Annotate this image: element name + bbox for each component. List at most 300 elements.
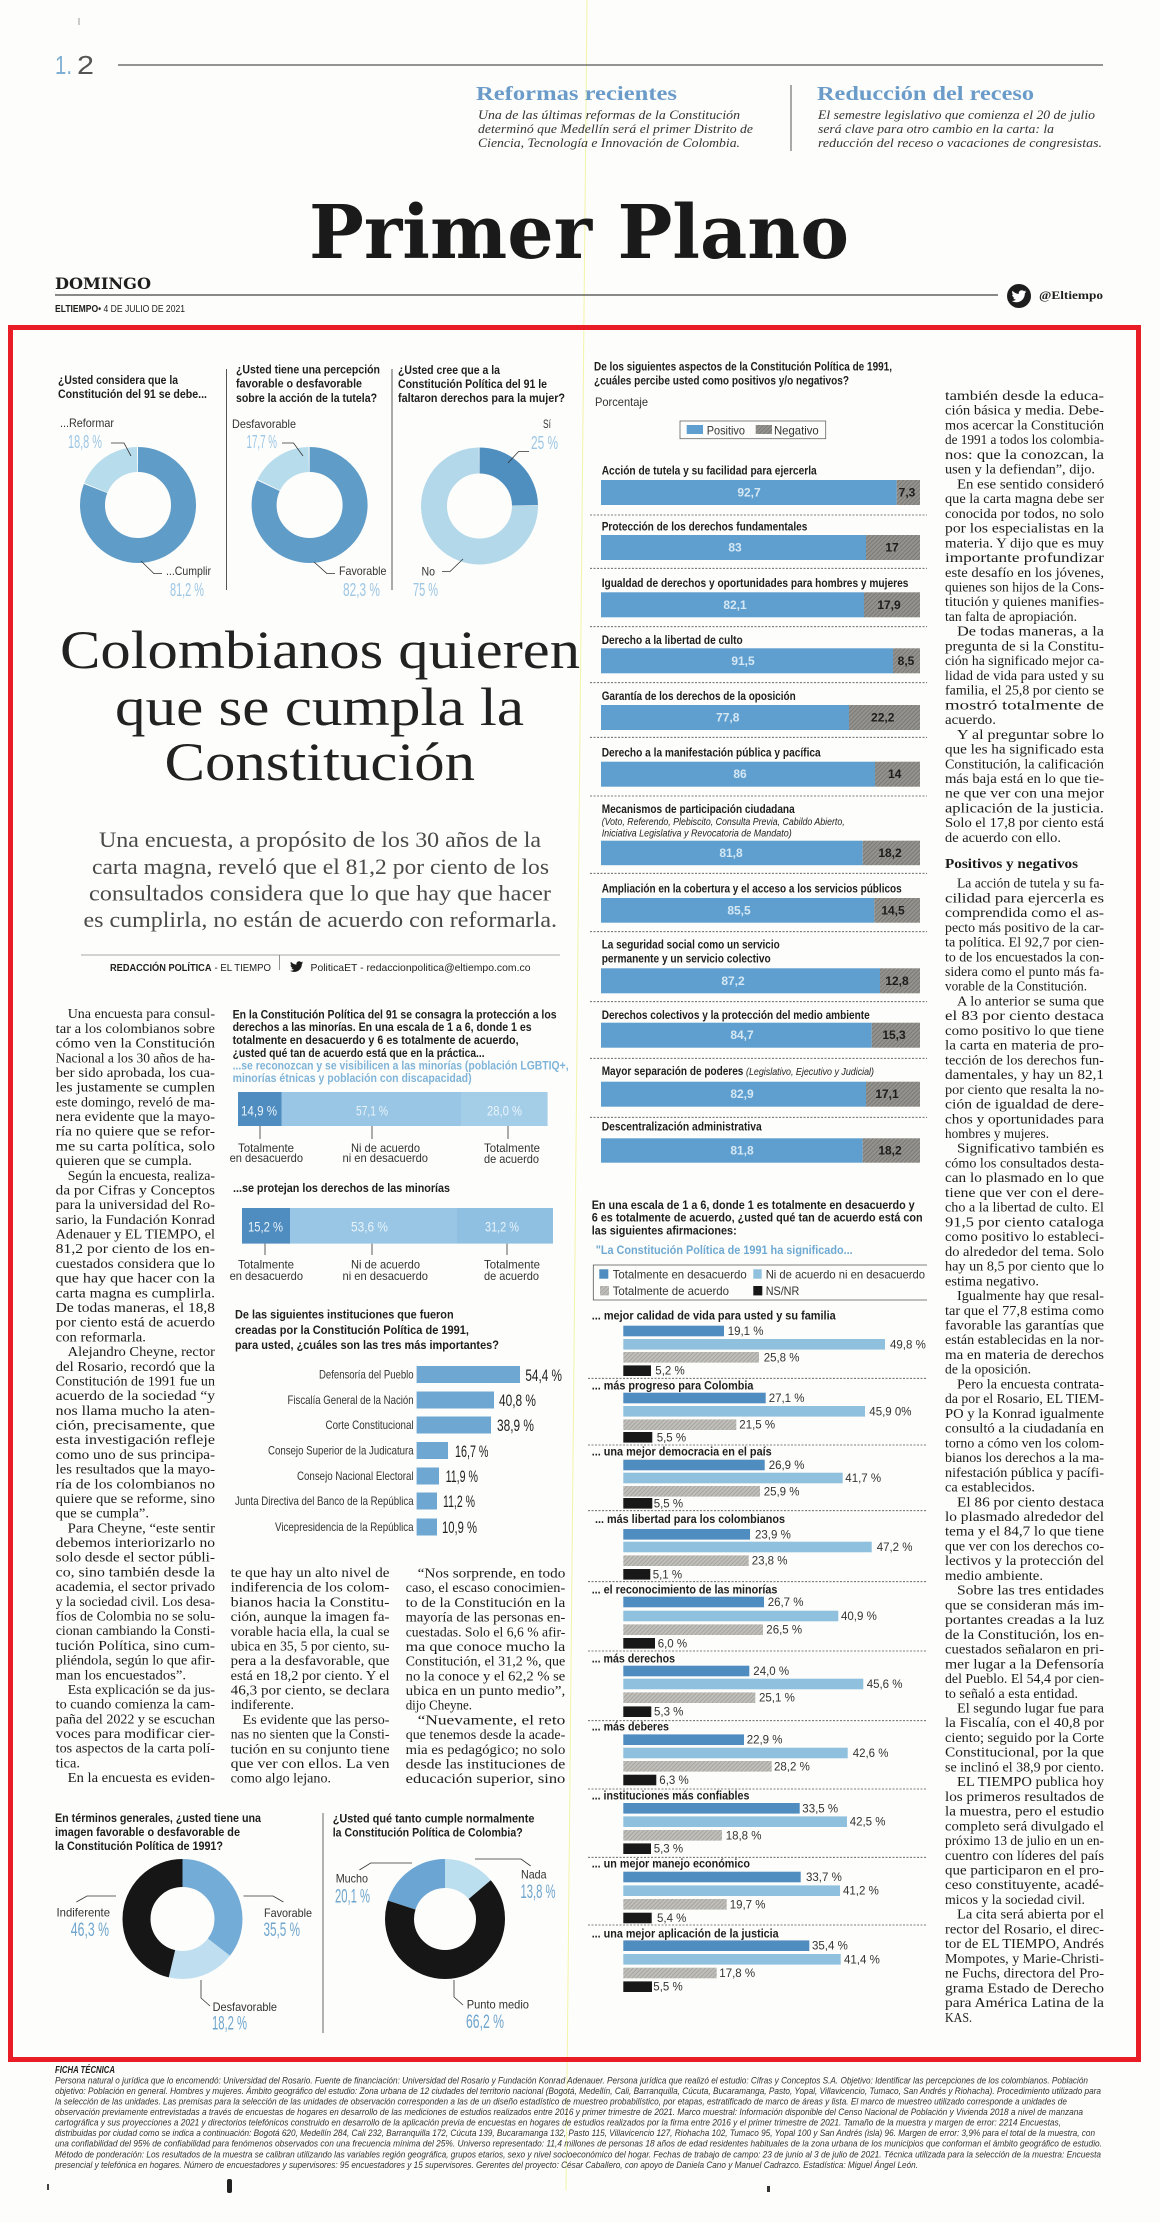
- chart: aspectos positivos y negativos: De los siguientes aspectos de la Constitución Política de 1991,: [594, 360, 892, 374]
- group: más deberes: 22,9 %: [747, 1735, 783, 1747]
- group: reconocimiento de las minorías: 40,9 %: [841, 1611, 877, 1623]
- body text: column 2: vorable hacia ella, la cual se: [231, 1625, 390, 1640]
- donut: imagen favorable o desfavorable: 35,5 %: [264, 1920, 300, 1941]
- body text: column 3: “Nos sorprende, en todo: [418, 1566, 565, 1582]
- group: más derechos: 5,3 %: [654, 1707, 683, 1719]
- donut: Constitución se debe: 81,2 %: [170, 580, 204, 600]
- group: mejor manejo económico: 5,4 %: [657, 1913, 686, 1925]
- body text: column 3: educación superior, sino: [406, 1772, 565, 1787]
- body text: column 4: bianos los derechos a la ma-: [945, 1451, 1104, 1466]
- body text: column 4: [945, 389, 1105, 2026]
- page number: 1.: [55, 50, 72, 80]
- donut: derechos para la mujer: Sí: [543, 417, 551, 431]
- legend: positivo / negativo: [680, 421, 826, 439]
- body text: column 3: dijo Cheyne.: [406, 1699, 472, 1714]
- donut: derechos para la mujer: Constitución Política del 91 le: [398, 377, 547, 391]
- group: más progreso: [592, 1379, 912, 1444]
- donut: acción de tutela: [232, 362, 387, 600]
- donut: imagen favorable o desfavorable: En términos generales, ¿usted tiene una: [55, 1811, 261, 1825]
- body text: column 4: lidad de vida para usted y su: [945, 669, 1104, 684]
- body text: column 1: Según la encuesta, realiza-: [68, 1169, 215, 1184]
- chart: la Constitución ha significado: las siguientes afirmaciones:: [592, 1223, 737, 1237]
- donut: Constitución se debe: 18,8 %: [68, 432, 102, 452]
- bar: se reconozcan: ni en desacuerdo: [342, 1151, 428, 1165]
- row: cobertura servicios públicos: 85,5: [727, 904, 751, 918]
- bar: se reconozcan: en desacuerdo: [230, 1151, 303, 1165]
- group: mejor calidad de vida: ... mejor calidad de vida para usted y su familia: [592, 1309, 836, 1323]
- body text: column 4: Solo el 17,8 por ciento está: [945, 816, 1105, 831]
- body text: column 2: está en 18,2 por ciento. Y el: [231, 1669, 390, 1684]
- teaser: Reducción del receso: [817, 83, 1102, 150]
- body text: column 2: indiferente.: [231, 1698, 294, 1713]
- teaser: Reformas recientes: determinó que Medellín será el primer Distrito de: [478, 121, 753, 136]
- body text: column 4: también desde la educa-: [945, 389, 1104, 404]
- body text: column 4: que les ha significado esta: [945, 742, 1105, 758]
- row: cobertura servicios públicos: [601, 881, 920, 923]
- body text: column 1: que hay que hacer con la: [56, 1272, 216, 1287]
- chart: instituciones más importantes: De las siguientes instituciones que fueron: [235, 1308, 454, 1322]
- body text: column 4: tan falta de apropiación.: [945, 610, 1077, 625]
- body text: column 1: les resultados que la mayo-: [56, 1463, 215, 1478]
- chart: instituciones más importantes: 10,9 %: [442, 1518, 477, 1537]
- body text: column 4: Constitucional, por la que: [945, 1746, 1104, 1761]
- body text: column 1: Constitución de 1991 fue un: [56, 1374, 215, 1390]
- body text: column 4: ceso constituyente, acadé-: [945, 1878, 1104, 1893]
- chart: protección a minorías (stacked bars): ¿usted qué tan de acuerdo está que en la práctica...: [233, 1046, 485, 1060]
- body text: column 4: pregunta de si la Constitu-: [945, 639, 1104, 654]
- group: mejor democracia: ... una mejor democracia en el país: [592, 1445, 772, 1459]
- donut: Constitución se debe: ...Cumplir: [166, 564, 211, 578]
- chart: instituciones más importantes: 40,8 %: [499, 1391, 536, 1410]
- body text: column 1: les justamente se cumplen: [56, 1081, 215, 1096]
- bar: se reconozcan: 57,1 %: [356, 1102, 388, 1118]
- chart: la Constitución ha significado: [588, 1198, 927, 1994]
- group: más derechos: [592, 1651, 903, 1719]
- body text: column 2: nas no sienten que la Consti-: [231, 1728, 390, 1743]
- byline: [81, 955, 560, 974]
- body text: column 4: de 1991 a todos los colombia-: [945, 433, 1104, 448]
- body text: column 4: El 86 por ciento destaca: [957, 1495, 1105, 1510]
- body text: column 3: mayoría de las personas en-: [406, 1611, 566, 1626]
- body text: column 1: pliéndola, según lo que afir-: [56, 1654, 215, 1669]
- body text: column 1: cuestados considera que lo: [56, 1257, 215, 1272]
- bar: se protejan: Ni de acuerdo: [351, 1258, 420, 1272]
- body text: column 4: ción ha significado mejor ca-: [945, 654, 1104, 669]
- body text: column 4: La acción de tutela y su fa-: [957, 877, 1104, 892]
- group: mejor aplicación de la justicia: [592, 1926, 880, 1994]
- body text: column 4: que ver con los derechos co-: [945, 1540, 1104, 1554]
- bar: se protejan: Totalmente: [238, 1258, 294, 1272]
- chart: instituciones más importantes: 38,9 %: [497, 1416, 534, 1435]
- deck text: Una encuesta, a propósito de los 30 años de la: [99, 827, 541, 852]
- donut: imagen favorable o desfavorable: 18,2 %: [212, 2014, 247, 2034]
- group: reconocimiento de las minorías: 6,0 %: [658, 1638, 687, 1650]
- donut: acción de tutela: Desfavorable: [232, 417, 296, 431]
- row: derechos colectivos: 84,7: [730, 1028, 754, 1042]
- body text: column 1: como uno de sus principa-: [56, 1448, 215, 1463]
- body text: column 1: cionan cambiando la Consti-: [56, 1624, 215, 1639]
- body text: column 2: tución en su conjunto tiene: [231, 1742, 390, 1757]
- red highlight frame: [10, 328, 1138, 2060]
- body text: column 4: materia. Y dijo que es muy: [945, 536, 1104, 551]
- body text: column 4: los primeros resultados de: [945, 1790, 1104, 1805]
- body text: column 4: aplicación de la justicia.: [945, 801, 1104, 816]
- body text: column 4: se inclinó el 38,9 por ciento.: [945, 1760, 1104, 1775]
- body text: column 1: En la encuesta es eviden-: [68, 1771, 215, 1786]
- group: mejor aplicación de la justicia: 41,4 %: [844, 1954, 880, 1966]
- chart: instituciones más importantes: Defensoría del Pueblo: [319, 1368, 414, 1382]
- body text: column 4: ne Fuchs, directora del Pro-: [945, 1967, 1104, 1982]
- row: igualdad de derechos: Igualdad de derechos y oportunidades para hombres y mujeres: [602, 576, 909, 590]
- row: mecanismos de participación: [601, 802, 920, 865]
- body text: column 4: próximo 13 de julio en un en-: [945, 1834, 1104, 1849]
- body text: column 1: cómo ven la Constitución: [56, 1037, 215, 1052]
- group: más libertad: ... más libertad para los colombianos: [595, 1512, 785, 1526]
- deck text: es cumplirla, no están de acuerdo con reformarla.: [84, 907, 557, 932]
- body text: column 3: Constitución, el 31,2 %, que: [406, 1655, 565, 1670]
- main headline: [60, 620, 580, 792]
- body text: column 4: como positivo lo estableci-: [945, 1230, 1104, 1245]
- ficha técnica: presencial y telefónica en hogares. Número de encuestadores y supervisores: 95 encuestadores y 15 supervisores. Gerentes del proyecto: César Caballero, con apoyo de Daniela Cano y Manuel Cadrazco. Estadística: Miguel Ángel León.: [54, 2160, 918, 2171]
- row: cobertura servicios públicos: Ampliación en la cobertura y el acceso a los servicios públicos: [602, 881, 902, 895]
- group: mejor calidad de vida: 25,8 %: [764, 1352, 800, 1364]
- body text: column 4: por ciento que resalta la no-: [945, 1083, 1104, 1098]
- donut: derechos para la mujer: faltaron derechos para la mujer?: [398, 391, 565, 405]
- body text: column 4: cuentro con líderes del país: [945, 1849, 1104, 1864]
- body text: column 4: Pero la encuesta contrata-: [957, 1377, 1104, 1392]
- body text: column 4: importante profundizar: [945, 551, 1104, 566]
- teaser: Reformas recientes: Una de las últimas reformas de la Constitución: [478, 107, 740, 122]
- body text: column 3: “Nuevamente, el reto: [418, 1713, 565, 1728]
- group: más libertad: 5,1 %: [653, 1569, 682, 1581]
- row: acción de tutela: Acción de tutela y su facilidad para ejercerla: [602, 464, 817, 478]
- body text: column 1: quieren que se cumpla.: [56, 1154, 192, 1169]
- donut: imagen favorable o desfavorable: Desfavorable: [213, 2000, 277, 2014]
- group: mejor democracia: 5,5 %: [654, 1498, 683, 1510]
- body text: column 4: sidera como el punto más fa-: [945, 965, 1104, 980]
- row: acción de tutela: 92,7: [737, 486, 761, 500]
- body text: column 4: que la carta magna debe ser: [945, 492, 1104, 507]
- group: más deberes: ... más deberes: [592, 1720, 669, 1734]
- body text: column 1: y la sociedad civil. Los desa-: [56, 1595, 215, 1610]
- row: separación de poderes: 17,1: [875, 1087, 899, 1101]
- chart: aspectos positivos y negativos: [590, 360, 927, 1163]
- body text: column 4: ciento; seguido por la Corte: [945, 1731, 1104, 1746]
- body text: column 4: el 83 por ciento destaca: [945, 1009, 1105, 1024]
- body text: column 4: la muestra, pero el estudio: [945, 1805, 1104, 1820]
- body text: column 2: ubica en 35, 5 por ciento, su-: [231, 1640, 390, 1654]
- body text: column 4: consultó a la ciudadanía en: [945, 1422, 1104, 1437]
- group: reconocimiento de las minorías: [592, 1582, 877, 1650]
- group: más libertad: 23,9 %: [755, 1529, 791, 1541]
- row: mecanismos de participación: (Voto, Referendo, Plebiscito, Consulta Previa, Cabildo Abierto,: [602, 817, 845, 828]
- donut: imagen favorable o desfavorable: Favorable: [264, 1906, 312, 1920]
- group: instituciones más confiables: 5,3 %: [654, 1844, 683, 1856]
- body text: column 2: Es evidente que las perso-: [243, 1713, 390, 1728]
- group: mejor calidad de vida: 49,8 %: [890, 1339, 926, 1351]
- body text: column 4: completo será divulgado el: [945, 1819, 1104, 1834]
- body text: column 4: cho a la libertad de culto. El: [945, 1201, 1104, 1216]
- row: mecanismos de participación: Mecanismos de participación ciudadana: [602, 802, 795, 816]
- donut: Constitución se debe: ...Reformar: [60, 416, 114, 430]
- donut: qué tanto cumple: 66,2 %: [466, 2012, 504, 2033]
- row: libertad de culto: [601, 633, 920, 673]
- bar: se protejan: 15,2 %: [248, 1218, 283, 1234]
- body text: column 4: pecto más positivo de la car-: [945, 921, 1104, 936]
- donut: qué tanto cumple: Punto medio: [467, 1998, 529, 2012]
- chart: instituciones más importantes: creadas por la Constitución Política de 1991,: [235, 1323, 469, 1337]
- row: derechos fundamentales: [601, 520, 920, 560]
- body text: column 1: esta investigación refleje: [56, 1433, 215, 1448]
- group: mejor democracia: 41,7 %: [845, 1473, 881, 1485]
- group: reconocimiento de las minorías: 26,7 %: [768, 1597, 804, 1609]
- group: mejor manejo económico: 33,7 %: [806, 1872, 842, 1884]
- body text: column 4: de acuerdo con ello.: [945, 831, 1061, 846]
- legend: NS/NR: [766, 1284, 800, 1298]
- body text: column 4: rector del Rosario, el direc-: [945, 1922, 1104, 1937]
- group: más derechos: 25,1 %: [759, 1693, 795, 1705]
- body text: column 1: [56, 1007, 216, 1786]
- row: cobertura servicios públicos: 14,5: [881, 904, 905, 918]
- body text: column 4: ción básica y media. Debe-: [945, 404, 1104, 419]
- body text: column 4: familia, el 25,8 por ciento se: [945, 684, 1104, 699]
- body text: column 4: tar que el 77,8 estima como: [945, 1304, 1104, 1319]
- body text: column 1: fíos de Colombia no se solu-: [56, 1610, 215, 1624]
- body text: column 1: tución Política, sino cum-: [56, 1639, 215, 1654]
- group: instituciones más confiables: [592, 1788, 886, 1856]
- body text: column 1: Para Cheyne, “este sentir: [68, 1521, 215, 1536]
- row: separación de poderes: Mayor separación de poderes: [602, 1064, 744, 1078]
- group: más progreso: 21,5 %: [739, 1420, 775, 1432]
- deck text: consultados considera que lo que hay que hacer: [89, 881, 552, 906]
- body text: column 4: tema y el 84,7 lo que tiene: [945, 1525, 1104, 1540]
- row: manifestación pública: [601, 746, 920, 787]
- row: libertad de culto: 8,5: [898, 654, 915, 668]
- teaser: Reformas recientes: Reformas recientes: [476, 83, 677, 105]
- donut: acción de tutela: ¿Usted tiene una percepción: [236, 362, 380, 376]
- body text: column 4: En ese sentido consideró: [957, 477, 1104, 492]
- donut: acción de tutela: sobre la acción de la tutela?: [236, 391, 377, 405]
- group: más progreso: 45,9 0%: [869, 1406, 912, 1418]
- group: más derechos: 45,6 %: [867, 1679, 903, 1691]
- masthead strip: @Eltiempo: [1039, 288, 1103, 302]
- donut: imagen favorable o desfavorable: la Constitución Política de 1991?: [55, 1839, 223, 1853]
- body text: column 4: lo plasmado alrededor del: [945, 1510, 1104, 1525]
- row: descentralización: 81,8: [730, 1144, 754, 1158]
- ficha técnica: FICHA TÉCNICA: [55, 2063, 115, 2076]
- body text: column 1: Nacional a los 30 años de ha-: [56, 1051, 215, 1066]
- body text: column 1: to cuando comienza la cam-: [56, 1698, 215, 1713]
- group: mejor manejo económico: 19,7 %: [730, 1899, 766, 1911]
- body text: column 4: para América Latina de la: [945, 1996, 1105, 2011]
- body text: column 4: EL TIEMPO publica hoy: [957, 1775, 1104, 1790]
- body text: column 4: estima negativo.: [945, 1274, 1039, 1289]
- body text: column 4: medio ambiente.: [945, 1569, 1043, 1584]
- chart: instituciones más importantes: 11,9 %: [446, 1467, 478, 1486]
- ficha técnica: [54, 2063, 1102, 2171]
- row: separación de poderes: [601, 1064, 920, 1107]
- group: mejor calidad de vida: 19,1 %: [728, 1326, 764, 1338]
- group: más derechos: 24,0 %: [753, 1666, 789, 1678]
- body text: column 2: que ver con ellos. La ven: [231, 1757, 390, 1772]
- bar: se protejan: 31,2 %: [485, 1218, 519, 1234]
- body text: column 1: sario, la Fundación Konrad: [56, 1213, 215, 1228]
- body text: column 1: solo desde el sector públi-: [56, 1551, 215, 1566]
- donut: qué tanto cumple: 13,8 %: [520, 1882, 556, 1903]
- group: mejor aplicación de la justicia: ... una mejor aplicación de la justicia: [592, 1926, 779, 1940]
- group: mejor manejo económico: 41,2 %: [843, 1886, 879, 1898]
- teaser: Reformas recientes: [476, 83, 753, 150]
- teaser: Reducción del receso: El semestre legislativo que comienza el 20 de julio: [817, 107, 1096, 122]
- bar: se protejan: 53,6 %: [351, 1218, 388, 1234]
- bar: se protejan: Totalmente: [484, 1258, 540, 1272]
- body text: column 4: Sobre las tres entidades: [957, 1584, 1104, 1599]
- body text: column 4: El segundo lugar fue para: [957, 1702, 1105, 1716]
- row: separación de poderes: 82,9: [730, 1087, 754, 1101]
- body text: column 4: de la oposición.: [945, 1363, 1031, 1378]
- donut: acción de tutela: Favorable: [339, 564, 387, 578]
- body text: column 1: ría no quiere que se refor-: [56, 1125, 215, 1140]
- body text: column 4: tor de EL TIEMPO, Andrés: [945, 1937, 1104, 1952]
- body text: column 4: do alrededor del tema. Solo: [945, 1245, 1104, 1260]
- bar: se protejan: ni en desacuerdo: [342, 1269, 428, 1283]
- bar: se reconozcan: Totalmente: [484, 1141, 540, 1155]
- donut: derechos para la mujer: No: [422, 564, 435, 578]
- body text: column 4: da por el Rosario, EL TIEM-: [945, 1392, 1104, 1407]
- bar: se reconozcan: 14,9 %: [241, 1102, 277, 1118]
- body text: column 4: ca establecidos.: [945, 1480, 1035, 1496]
- body text: column 1: Alejandro Cheyne, rector: [68, 1345, 215, 1360]
- body text: column 1: tar a los colombianos sobre: [56, 1022, 215, 1037]
- row: acción de tutela: [601, 464, 920, 505]
- masthead strip: [55, 274, 1103, 315]
- body text: column 4: grama Estado de Derecho: [945, 1981, 1104, 1996]
- row: derechos de la oposición: 22,2: [871, 710, 895, 724]
- bar: se protejan: de acuerdo: [484, 1269, 539, 1283]
- row: seguridad social: permanente y un servicio colectivo: [602, 951, 771, 965]
- chart: protección a minorías (stacked bars): derechos a las minorías. En una escala de 1 a 6, donde 1 es: [233, 1020, 532, 1034]
- body text: column 4: acuerdo.: [945, 713, 996, 728]
- group: más libertad: 23,8 %: [752, 1556, 788, 1568]
- body text: column 1: tica.: [56, 1756, 80, 1771]
- row: seguridad social: 12,8: [885, 974, 909, 988]
- body text: column 1: ber sido aprobada, los cua-: [56, 1066, 215, 1081]
- body text: column 1: Una encuesta para consul-: [68, 1007, 215, 1022]
- page number: [55, 50, 94, 80]
- legend: positivo / negativo: Negativo: [774, 423, 819, 437]
- donut: acción de tutela: favorable o desfavorable: [236, 376, 362, 390]
- body text: column 4: nos: que la conozcan, la: [945, 448, 1105, 463]
- body text: column 4: ma en materia de derechos: [945, 1348, 1104, 1363]
- body text: column 2: 46,3 por ciento, se declara: [231, 1684, 390, 1698]
- legend: Ni de acuerdo ni en desacuerdo: [766, 1268, 925, 1282]
- body text: column 4: PO y la Konrad igualmente: [945, 1407, 1104, 1422]
- bar: se reconozcan: [230, 1092, 548, 1166]
- teaser: Reducción del receso: reducción del receso o vacaciones de congresistas.: [818, 135, 1102, 150]
- legend: Totalmente de acuerdo: [613, 1284, 729, 1298]
- body text: column 2: te que hay un alto nivel de: [231, 1566, 390, 1581]
- chart: la Constitución ha significado: 6 es totalmente de acuerdo, ¿usted qué tan de acuerdo está con: [592, 1211, 923, 1225]
- body text: column 1: quiere que se reforme, sino: [56, 1492, 215, 1507]
- row: mecanismos de participación: 18,2: [878, 846, 902, 860]
- donut: derechos para la mujer: 25 %: [531, 433, 558, 453]
- section title: Primer Plano: Primer Plano: [309, 190, 849, 276]
- body text: column 4: como positivo lo que tiene: [945, 1024, 1104, 1039]
- row: manifestación pública: Derecho a la manifestación pública y pacífica: [602, 746, 821, 760]
- body text: column 4: Significativo también es: [957, 1142, 1104, 1157]
- donut: derechos para la mujer: [398, 363, 565, 600]
- row: descentralización: [601, 1120, 920, 1163]
- body text: column 3: [406, 1566, 566, 1787]
- body text: column 2: [231, 1566, 390, 1787]
- group: mejor democracia: [592, 1445, 881, 1510]
- body text: column 1: carta magna es cumplirla.: [56, 1286, 215, 1301]
- body text: column 4: torno a cómo ven los colom-: [945, 1436, 1104, 1451]
- row: derechos fundamentales: Protección de los derechos fundamentales: [602, 520, 808, 534]
- body text: column 4: KAS.: [945, 2011, 972, 2026]
- row: separación de poderes: (Legislativo, Ejecutivo y Judicial): [746, 1067, 874, 1078]
- body text: column 4: Mompotes, y Marie-Christi-: [945, 1952, 1104, 1967]
- body text: column 4: hombres y mujeres.: [945, 1127, 1049, 1142]
- row: seguridad social: [601, 937, 920, 993]
- row: derechos fundamentales: 17: [885, 540, 899, 554]
- body text: column 1: man los encuestados”.: [56, 1668, 186, 1683]
- body text: column 1: del Rosario, recordó que la: [56, 1360, 216, 1375]
- body text: column 3: mia es pedagógico; no solo: [406, 1743, 565, 1758]
- byline: PoliticaET - redaccionpolitica@eltiempo.com.co: [310, 962, 531, 974]
- legend: positivo / negativo: Positivo: [707, 423, 745, 437]
- row: libertad de culto: Derecho a la libertad de culto: [602, 633, 743, 647]
- body text: column 4: que se consideran más im-: [945, 1598, 1104, 1613]
- donut: derechos para la mujer: 75 %: [413, 580, 438, 600]
- body text: column 1: tos aspectos de la carta polí-: [56, 1742, 215, 1757]
- body text: column 2: como algo lejano.: [231, 1772, 331, 1787]
- body text: column 4: mer lugar a la Defensoría: [945, 1657, 1105, 1672]
- row: derechos colectivos: Derechos colectivos y la protección del medio ambiente: [602, 1008, 870, 1022]
- teaser: Reducción del receso: será clave para otro cambio en la carta: la: [818, 121, 1055, 136]
- donut: imagen favorable o desfavorable: imagen favorable o desfavorable de: [55, 1825, 240, 1839]
- chart: aspectos positivos y negativos: ¿cuáles percibe usted como positivos y/o negativos?: [594, 374, 849, 388]
- body text: column 3: caso, el escaso conocimien-: [406, 1581, 566, 1596]
- body text: column 4: cuestados señalaron en pri-: [945, 1643, 1104, 1658]
- teaser: Reducción del receso: Reducción del receso: [817, 83, 1034, 105]
- body text: column 4: hay un 8,5 por ciento que lo: [945, 1260, 1104, 1275]
- body text: column 3: no la conoce y el 62,2 % se: [406, 1669, 565, 1684]
- byline: - EL TIEMPO: [214, 962, 271, 974]
- group: instituciones más confiables: 33,5 %: [802, 1803, 838, 1815]
- chart: protección a minorías (stacked bars): ...se protejan los derechos de las minorías: [233, 1181, 450, 1195]
- body text: column 1: voces para modificar cier-: [56, 1727, 215, 1742]
- bar: se reconozcan: Totalmente: [238, 1141, 294, 1155]
- body text: column 4: que participaron en el pro-: [945, 1864, 1104, 1878]
- body text: column 4: favorable las garantías que: [945, 1318, 1104, 1334]
- group: más deberes: 42,6 %: [853, 1748, 889, 1760]
- row: igualdad de derechos: 17,9: [877, 598, 901, 612]
- masthead strip: ELTIEMPO• 4 DE JULIO DE 2021: [55, 304, 185, 315]
- body text: column 1: este domingo, reveló de ma-: [56, 1095, 215, 1110]
- group: reconocimiento de las minorías: ... el reconocimiento de las minorías: [592, 1582, 778, 1596]
- body text: column 4: del Pueblo. El 54,4 por cien-: [945, 1672, 1104, 1687]
- group: mejor aplicación de la justicia: 17,8 %: [719, 1968, 755, 1980]
- body text: column 1: ría de los colombianos no: [56, 1477, 215, 1492]
- main headline: Constitución: [164, 732, 475, 792]
- chart: protección a minorías (stacked bars): minorías étnicas y población con discapacidad): [233, 1071, 472, 1085]
- chart: la Constitución ha significado: En una escala de 1 a 6, donde 1 es totalmente en desacuerdo y: [592, 1198, 915, 1212]
- row: acción de tutela: 7,3: [899, 486, 916, 500]
- donut: qué tanto cumple: Nada: [521, 1868, 547, 1882]
- chart: instituciones más importantes: Consejo Superior de la Judicatura: [268, 1444, 414, 1458]
- page number: 2: [77, 50, 94, 80]
